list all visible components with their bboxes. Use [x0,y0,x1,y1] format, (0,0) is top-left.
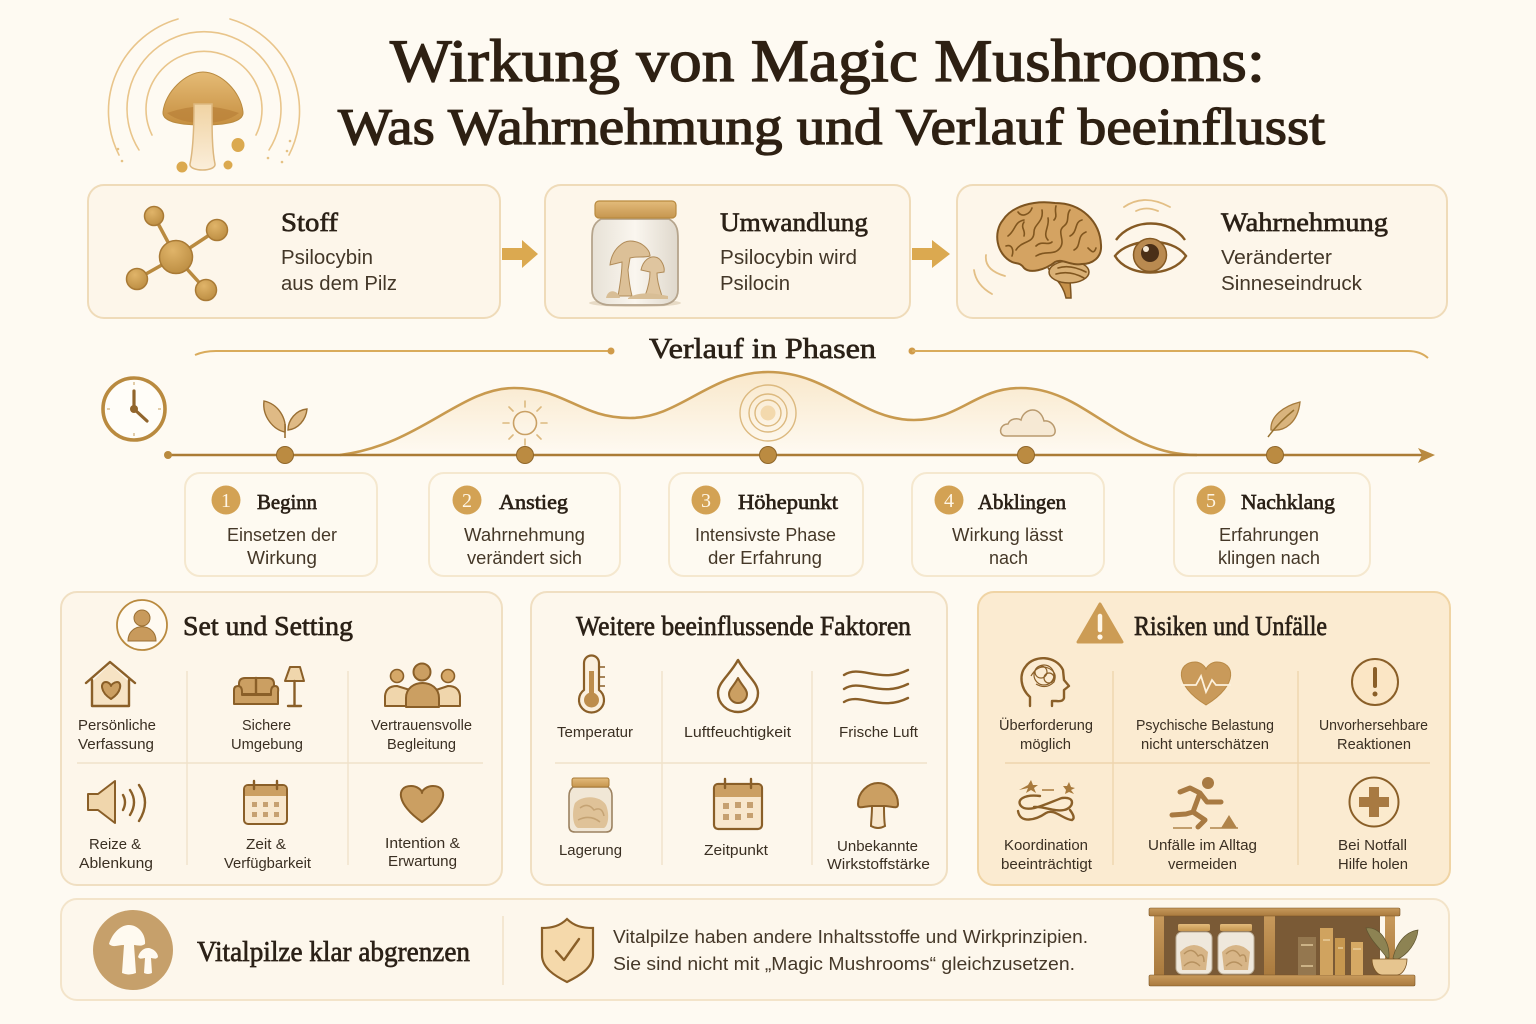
icon: water drop [718,660,758,712]
icon: jar with mushrooms [589,201,681,307]
text: Wahrnehmung description: Sinneseindruck [1221,273,1363,295]
icon: heart with pulse [1181,662,1231,705]
panel: Vitalpilze klar abgrenzen [61,899,1449,1000]
icon: sprout [264,401,307,438]
icon: molecule [126,206,228,300]
label: Koordination beeinträchtigt: Koordination [1004,837,1088,854]
heading: Wahrnehmung: Wahrnehmung [1221,208,1388,237]
arrow: Umwandlung to Wahrnehmung [912,240,950,268]
panel: Set und Setting [61,592,502,885]
icon: wooden shelf with jars, books and plant [1149,908,1418,986]
label: Unbekannte Wirkstoffstärke: Wirkstoffstärke [827,856,930,873]
icon: calendar [714,779,762,829]
label: Persönliche Verfassung: Verfassung [78,736,154,753]
text: Abklingen description [952,525,1063,568]
title: Was Wahrnehmung und Verlauf beeinflusst [338,99,1326,156]
label: Unfälle im Alltag vermeiden [1148,837,1257,873]
text: Umwandlung description: Psilocybin wird [720,247,857,269]
panel: Weitere beeinflussende Faktoren [531,592,947,885]
text: Umwandlung description: Psilocin [720,273,790,295]
text: Nachklang description [1218,525,1320,568]
number badge 2 [452,486,482,514]
label: Unvorhersehbare Reaktionen: Unvorhersehbare [1319,717,1428,734]
icon: shield with check [542,919,593,982]
icon: warning triangle [1078,604,1122,642]
label: Psychische Belastung: nicht unterschätzen [1141,736,1269,753]
label: Überforderung möglich [999,716,1093,753]
icon: peak rings [740,385,796,441]
label: Bei Notfall Hilfe holen: Bei Notfall [1338,837,1407,854]
icon: sound arcs around brain [974,200,1170,294]
label: Frische Luft: Frische Luft [839,724,919,741]
icon: head with tangled mind [1021,658,1069,706]
title [338,28,1326,156]
icon: heart [401,786,443,822]
text: Stoff description: Psilocybin [281,247,373,269]
label: Intention & Erwartung: Intention & [385,835,460,852]
phase card 3: Höhepunkt [669,473,863,576]
number badge 4 [934,486,964,514]
text: Beginn description [227,525,337,568]
icon: house with heart [86,662,135,706]
label: Koordination beeinträchtigt [1001,837,1093,873]
label: Unvorhersehbare Reaktionen: Reaktionen [1337,736,1411,753]
icon: sofa and lamp [234,667,304,706]
text: Abklingen description: Wirkung lässt [952,525,1063,545]
label: Unvorhersehbare Reaktionen [1319,717,1428,753]
phase card 1: Beginn [185,473,377,576]
phase card 2: Anstieg [429,473,620,576]
label: Reize & Ablenkung: Ablenkung [79,855,153,872]
label: Psychische Belastung [1136,717,1274,753]
label: Vertrauensvolle Begleitung: Begleitung [387,736,456,753]
label: Temperatur: Temperatur [557,724,633,741]
label: Bei Notfall Hilfe holen: Hilfe holen [1338,856,1408,873]
heading: Beginn: Beginn [257,490,317,514]
number badge 3 [692,486,720,514]
number badge 4: 4 [944,490,954,512]
label: Sichere Umgebung: Sichere [242,717,291,734]
chart: intensity curve [340,372,1197,455]
panel: Wahrnehmung [957,185,1447,318]
icon: mushroom [858,783,898,828]
label: Intention & Erwartung: Erwartung [388,853,457,870]
label: Vertrauensvolle Begleitung: Vertrauensvolle [371,717,472,734]
icon: calendar [244,781,287,824]
icon: coordination loops [1018,780,1075,820]
heading: Vitalpilze klar abgrenzen: Vitalpilze klar abgrenzen [197,937,470,968]
text: Nachklang description: Erfahrungen [1219,525,1319,545]
text: Beginn description: Einsetzen der [227,525,337,545]
text: Beginn description: Wirkung [247,548,317,568]
label: Unbekannte Wirkstoffstärke: Unbekannte [837,838,918,855]
label: Persönliche Verfassung: Persönliche [78,717,156,734]
heading: Nachklang: Nachklang [1241,490,1336,514]
icon: first aid cross [1350,778,1398,826]
panel: Risiken und Unfälle [978,592,1450,885]
label: Unfälle im Alltag vermeiden: Unfälle im Alltag [1148,837,1257,854]
phase card 4: Abklingen [912,473,1104,576]
label: Lagerung: Lagerung [559,842,622,859]
heading: Weitere beeinflussende Faktoren: Weitere beeinflussende Faktoren [576,611,911,641]
text: Anstieg description: verändert sich [467,548,582,568]
icon: air waves [844,670,908,703]
label: Reize & Ablenkung: Reize & [89,836,141,853]
text: Höhepunkt description: Intensivste Phase [695,525,836,545]
icon: storage jar [569,778,612,832]
title: Wirkung von Magic Mushrooms: [390,28,1265,94]
text: Wahrnehmung description [1221,247,1363,295]
text: Wahrnehmung description: Veränderter [1221,247,1332,269]
heading: Risiken und Unfälle: Risiken und Unfälle [1134,611,1327,641]
heading: Set und Setting: Set und Setting [183,611,353,641]
text: Vitalpilze note: Sie sind nicht mit „Magic Mushrooms“ gleichzusetzen. [613,954,1075,974]
icon: three people [385,664,460,707]
heading: Stoff: Stoff [281,208,338,237]
label: Persönliche Verfassung [78,717,156,753]
text: Abklingen description: nach [989,548,1028,568]
text: Anstieg description [464,525,585,568]
text: Vitalpilze note [613,927,1088,974]
number badge 1: 1 [221,490,231,512]
panel: Umwandlung [545,185,910,318]
text: Umwandlung description [720,247,857,295]
number badge 3: 3 [701,490,711,512]
icon: speaker [88,781,145,823]
number badge 5: 5 [1206,490,1216,512]
label: Zeit & Verfügbarkeit [224,836,312,872]
text: Stoff description [281,247,397,295]
icon: person in circle [117,600,167,650]
label: Vertrauensvolle Begleitung [371,717,472,753]
icon: leaf [1268,402,1300,437]
label: Unbekannte Wirkstoffstärke [827,838,930,873]
label: Zeitpunkt: Zeitpunkt [704,842,769,859]
text: Vitalpilze note: Vitalpilze haben andere Inhaltsstoffe und Wirkprinzipien. [613,927,1088,947]
icon: running figure [1172,777,1238,828]
label: Überforderung möglich: Überforderung [999,716,1093,734]
label: Intention & Erwartung [385,835,460,870]
text: Höhepunkt description: der Erfahrung [708,548,822,568]
label: Koordination beeinträchtigt: beeinträchtigt [1001,856,1093,873]
label: Reize & Ablenkung [79,836,153,872]
label: Überforderung möglich: möglich [1020,736,1071,753]
label: Psychische Belastung: Psychische Belastung [1136,717,1274,734]
label: Sichere Umgebung: Umgebung [231,736,303,753]
icon: brain [997,202,1101,298]
text: Höhepunkt description [695,525,836,568]
heading: Abklingen: Abklingen [978,490,1066,514]
heading: Umwandlung: Umwandlung [720,208,868,237]
heading: Anstieg: Anstieg [499,490,569,514]
heading: Verlauf in Phasen: Verlauf in Phasen [649,333,877,365]
number badge 1 [212,486,240,514]
text: Nachklang description: klingen nach [1218,548,1320,568]
text: Anstieg description: Wahrnehmung [464,525,585,545]
arrow: Stoff to Umwandlung [502,240,538,268]
label: Bei Notfall Hilfe holen [1338,837,1408,873]
timeline axis [164,446,1435,464]
label: Sichere Umgebung [231,717,303,753]
text: Stoff description: aus dem Pilz [281,273,397,295]
icon: cloud [1001,410,1055,436]
number badge 5 [1196,486,1226,514]
icon: eye [1115,224,1186,272]
number badge 2: 2 [462,490,472,512]
icon: mushrooms in circle [93,910,173,990]
heading: Verlauf in Phasen [195,333,1428,365]
phase card 5: Nachklang [1174,473,1370,576]
icon: exclamation circle [1352,659,1398,705]
icon: glowing mushroom [108,19,300,172]
icon: clock [103,378,165,440]
label: Luftfeuchtigkeit: Luftfeuchtigkeit [684,724,792,741]
panel: Stoff [88,185,500,318]
heading: Höhepunkt: Höhepunkt [738,490,838,514]
icon: sun [503,401,547,445]
label: Zeit & Verfügbarkeit: Verfügbarkeit [224,855,312,872]
label: Zeit & Verfügbarkeit: Zeit & [246,836,286,853]
icon: thermometer [579,656,605,712]
label: Unfälle im Alltag vermeiden: vermeiden [1168,856,1237,873]
